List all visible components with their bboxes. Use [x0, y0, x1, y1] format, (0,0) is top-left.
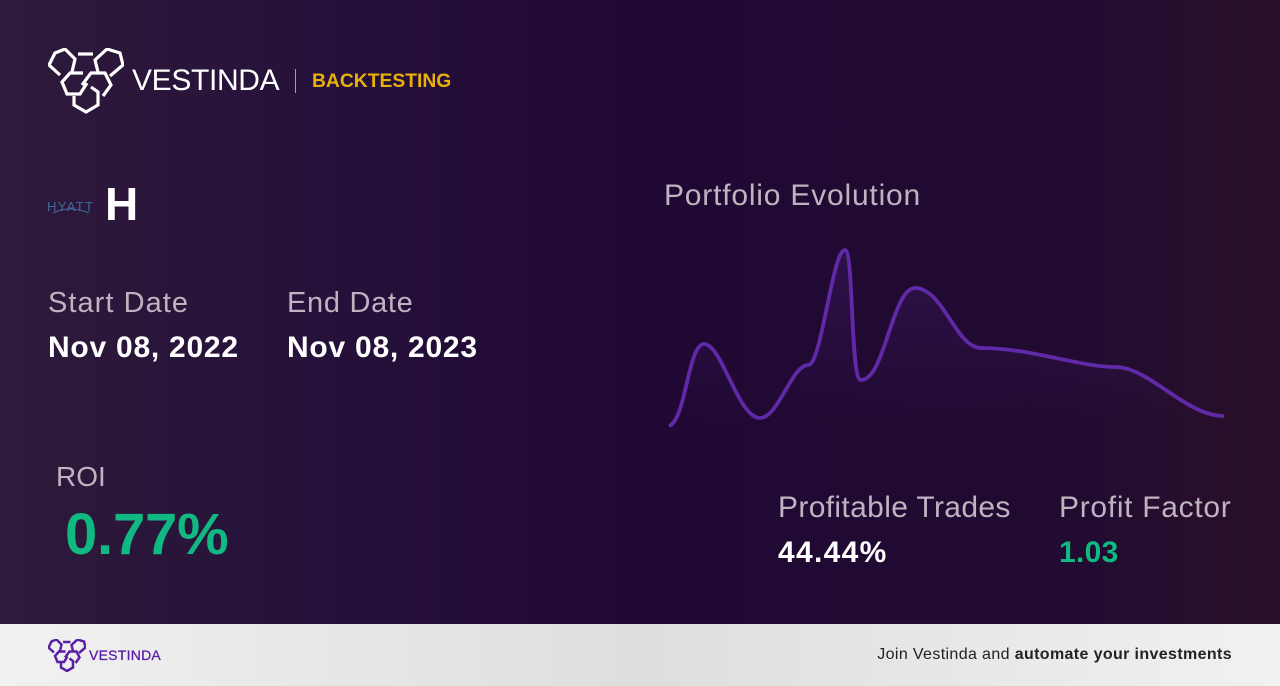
profitable trades value: 44.44% [778, 536, 888, 569]
profitable trades label: Profitable Trades [778, 491, 1011, 524]
line chart: portfolio evolution [668, 248, 1224, 428]
icon: small Vestinda logo [48, 639, 86, 672]
profit factor metric [1059, 491, 1231, 569]
profitable trades metric [778, 491, 1011, 569]
end date [287, 287, 478, 364]
icon: Vestinda hexagon logo [48, 48, 124, 114]
product label: BACKTESTING [312, 71, 451, 92]
footer wordmark: VESTINDA [89, 647, 161, 663]
profit factor label: Profit Factor [1059, 491, 1231, 524]
chart heading: Portfolio Evolution [664, 179, 921, 212]
icon: Hyatt logo: HYATT [47, 199, 93, 214]
end date value: Nov 08, 2023 [287, 331, 478, 364]
end date label: End Date [287, 287, 414, 319]
ticker block [47, 178, 138, 230]
footer call to action: Join Vestinda and automate your investments [877, 646, 1232, 663]
profit factor value: 1.03 [1059, 536, 1119, 569]
start date [48, 287, 239, 364]
start date value: Nov 08, 2022 [48, 331, 239, 364]
ticker symbol: H [105, 178, 138, 230]
footer bar [0, 624, 1280, 686]
ROI metric [56, 461, 228, 567]
start date label: Start Date [48, 287, 189, 319]
wordmark: VESTINDA [132, 64, 279, 97]
ROI label: ROI [56, 461, 106, 492]
divider [295, 69, 296, 93]
ROI value: 0.77% [65, 502, 228, 567]
header logo lockup [48, 48, 451, 114]
